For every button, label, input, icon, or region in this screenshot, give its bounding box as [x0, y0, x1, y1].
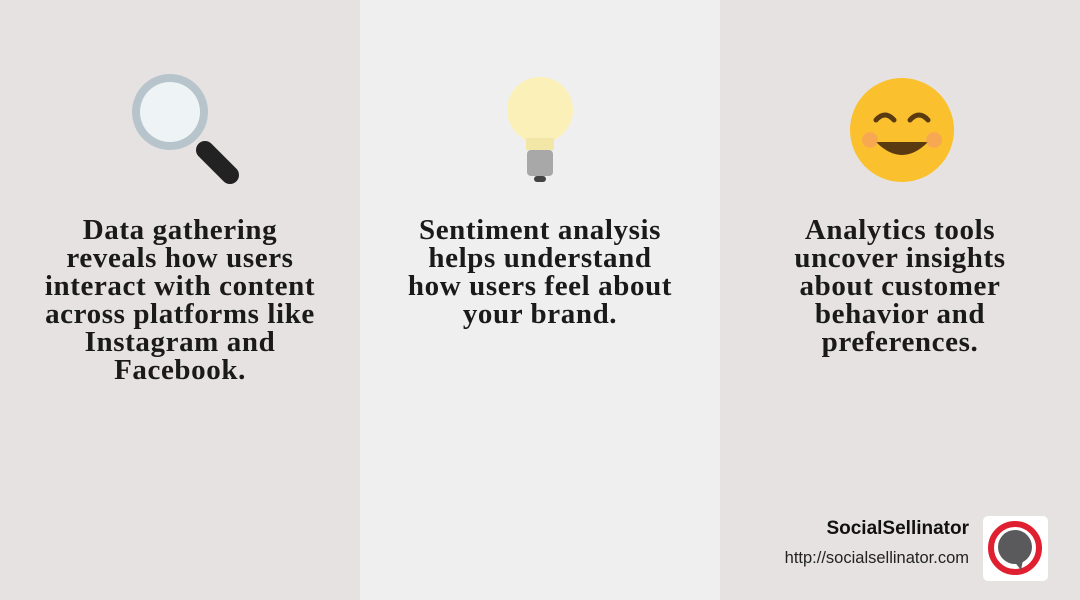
text: sentiment analysis: Sentiment analysis — [419, 214, 661, 246]
text: data gathering: Instagram and — [85, 326, 275, 358]
panel: analytics tools — [720, 0, 1080, 600]
footer brand — [785, 516, 1048, 581]
brand name: SocialSellinator — [826, 518, 969, 539]
text: data gathering: Facebook. — [114, 354, 246, 386]
text: data gathering: reveals how users — [66, 242, 294, 274]
text: data gathering — [45, 214, 315, 386]
text: sentiment analysis: how users feel about — [408, 270, 672, 302]
text: analytics tools: behavior and — [815, 298, 985, 330]
brand url: http://socialsellinator.com — [785, 549, 969, 567]
text: data gathering: interact with content — [45, 270, 315, 302]
text: analytics tools: Analytics tools — [805, 214, 995, 246]
text: sentiment analysis: your brand. — [463, 298, 617, 330]
panel: sentiment analysis — [360, 0, 720, 600]
icon: magnifying glass — [132, 74, 239, 184]
text: data gathering: Data gathering — [83, 214, 277, 246]
text: sentiment analysis: helps understand — [428, 242, 652, 274]
text: sentiment analysis — [408, 214, 672, 330]
text: analytics tools: uncover insights — [794, 242, 1006, 274]
icon: smiling face — [850, 78, 954, 182]
icon: light bulb — [507, 77, 573, 182]
text: analytics tools: preferences. — [822, 326, 978, 358]
text: analytics tools: about customer — [800, 270, 1000, 302]
text: data gathering: across platforms like — [45, 298, 315, 330]
text: analytics tools — [794, 214, 1006, 358]
logo — [983, 516, 1048, 581]
panel: data gathering — [0, 0, 360, 600]
